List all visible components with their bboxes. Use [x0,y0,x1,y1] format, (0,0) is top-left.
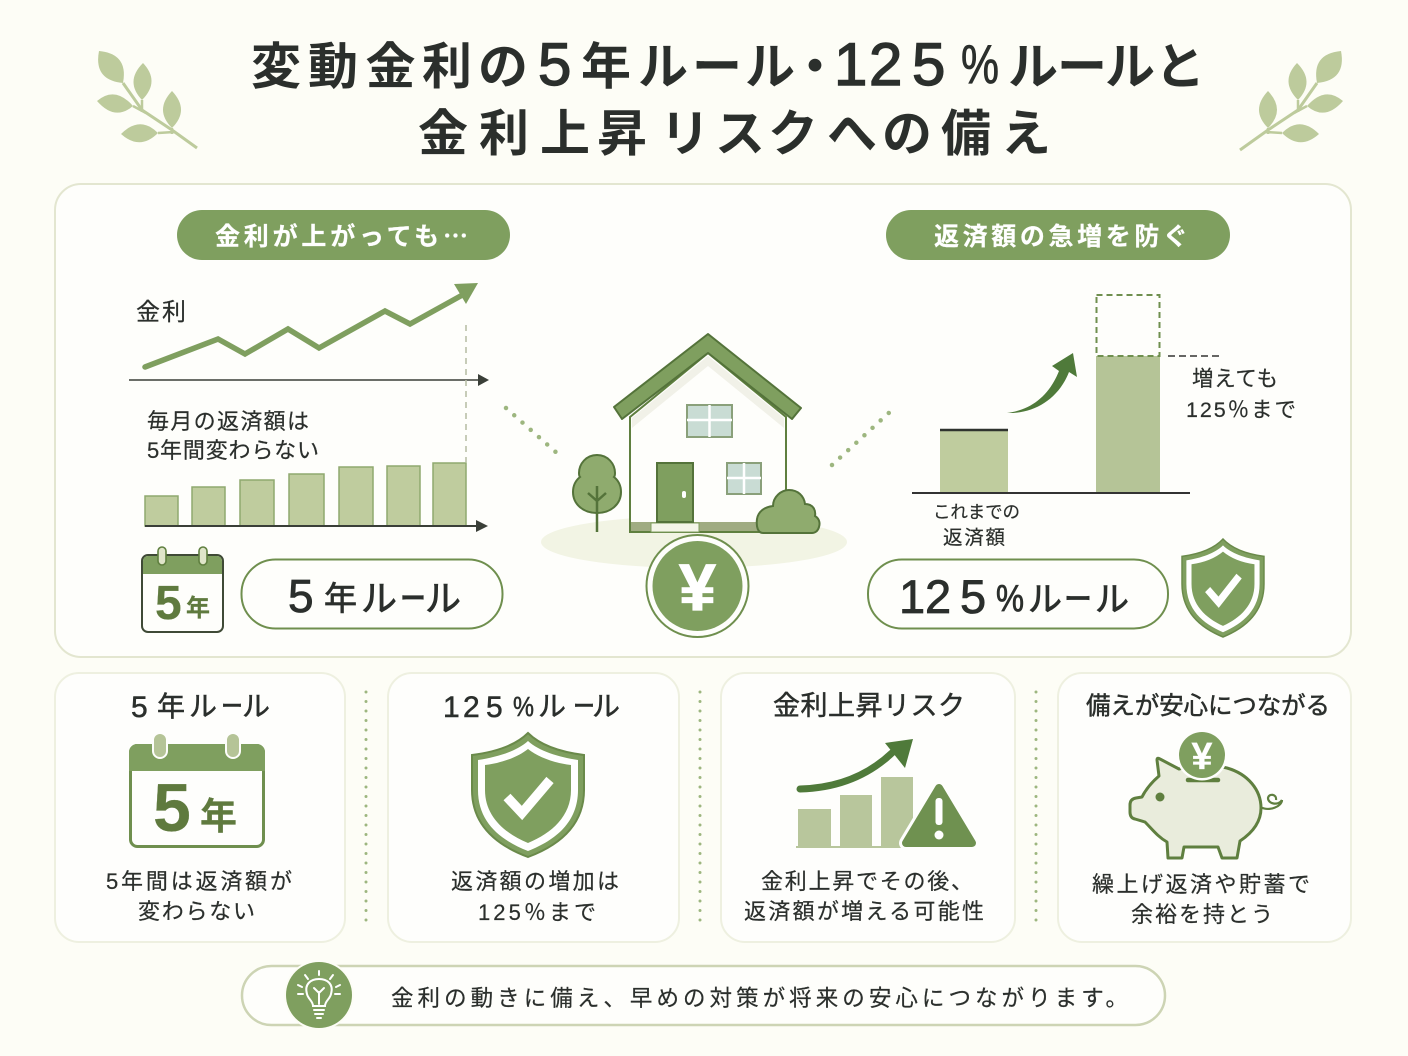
label: interest rate: 金利 [136,299,186,326]
label pill: 125 percent rule: ルル [1028,581,1129,619]
card description: 変わらない [138,899,255,924]
badge: interest rates rising: 金利が上がっても… [215,217,468,253]
icon: light bulb [284,960,354,1030]
icon: calendar: 5 [153,770,191,846]
icon: calendar: 年 [200,796,237,837]
card: interest rate risk [721,673,1015,942]
connector dots right [832,410,892,465]
card description [451,869,619,925]
icon: small shield with check [1182,539,1264,637]
card description [106,869,292,924]
badge: prevent payment spikes: 返済額の急増を防ぐ [934,217,1188,253]
panel: main diagram [55,184,1351,657]
separator [698,692,702,926]
title: 金利上昇リスクへの備え [418,106,1051,162]
footer text: 金利の動きに備え、早めの対策が将来の安心につながります。 [391,986,1128,1011]
card: preparation brings peace of mind [1058,673,1351,942]
text: monthly payment unchanged for 5 years: 5年間変わらない [147,438,319,463]
card description: 金利上昇でその後、 [761,869,973,894]
connector dots left [506,408,558,454]
separator [1034,692,1038,926]
icon: small calendar 5 years: 5 [155,577,182,630]
icon: left leaf sprig [97,51,197,148]
text: monthly payment unchanged for 5 years [147,409,319,463]
label pill: 5-year rule: 年 [324,580,357,617]
icon: rising bars with warning [796,739,972,847]
card description [744,869,984,924]
title: 変動金利の [251,39,528,95]
card description: 余裕を持とう [1131,902,1273,927]
card description [1092,872,1310,927]
badge: interest rates rising [177,210,510,260]
label pill: 5-year rule [242,560,502,628]
bar chart: 125 percent limit [912,295,1222,493]
card heading: 備えが安心につながる [1086,692,1330,720]
label pill: 125 percent rule [868,560,1168,628]
illustration: house with tree and bush [541,334,847,568]
footer message bar [242,960,1165,1030]
card description: 繰上げ返済や貯蓄で [1092,872,1310,897]
card description: 125％まで [478,900,596,925]
label pill: 125 percent rule: % [996,578,1024,620]
icon: right leaf sprig [1240,51,1343,150]
card: 5-year rule [55,673,345,942]
icon: small calendar 5 years [142,547,223,632]
card heading [443,691,620,724]
card heading: ー [573,691,595,722]
label: up to 125 percent [1186,367,1296,422]
icon: yen coin: ¥ [679,550,716,624]
icon: calendar [129,733,265,846]
card description: 5年間は返済額が [106,869,292,894]
label pill: 5-year rule: 5 [288,570,314,622]
card heading: 125 [443,691,503,724]
icon: piggy bank with yen coin: ¥ [1191,736,1213,778]
label pill: 5-year rule: ー [400,578,426,619]
icon: shield with check [472,733,584,857]
label: previous payment: 返済額 [943,527,1005,549]
label pill: 125 percent rule: 125 [899,570,986,623]
line chart: interest rate rising [129,283,489,462]
label pill: 5-year rule: ルル [361,578,461,619]
label pill: 125 percent rule: ー [1064,581,1092,619]
card description: 返済額の増加は [451,869,619,894]
label: previous payment [933,502,1020,549]
title: % [961,33,999,95]
label: previous payment: これまでの [933,502,1020,522]
icon: piggy bank with yen coin [1130,730,1282,858]
card description: 返済額が増える可能性 [744,899,984,924]
label: up to 125 percent: 125％まで [1186,398,1296,422]
card heading: ー [221,691,243,722]
title: ルールと [1008,39,1205,95]
title [251,31,1205,162]
separator [364,692,368,926]
icon: small calendar 5 years: 年 [186,595,210,622]
card heading: ルル [538,691,620,722]
title: 年ルール・ [581,39,840,95]
title: 125 [834,31,945,98]
icon: yen coin [646,535,748,637]
title: 5 [538,31,571,98]
card heading: 年ルル [157,691,270,722]
card heading: % [513,691,534,722]
text: monthly payment unchanged for 5 years: 毎月の返済額は [147,409,309,434]
label: up to 125 percent: 増えても [1192,367,1278,391]
bar chart: monthly payment [145,463,488,532]
card heading: 金利上昇リスク [773,691,965,721]
card: 125 percent rule [388,673,679,942]
badge: prevent payment spikes [886,210,1230,260]
card heading: 5 [131,691,148,724]
